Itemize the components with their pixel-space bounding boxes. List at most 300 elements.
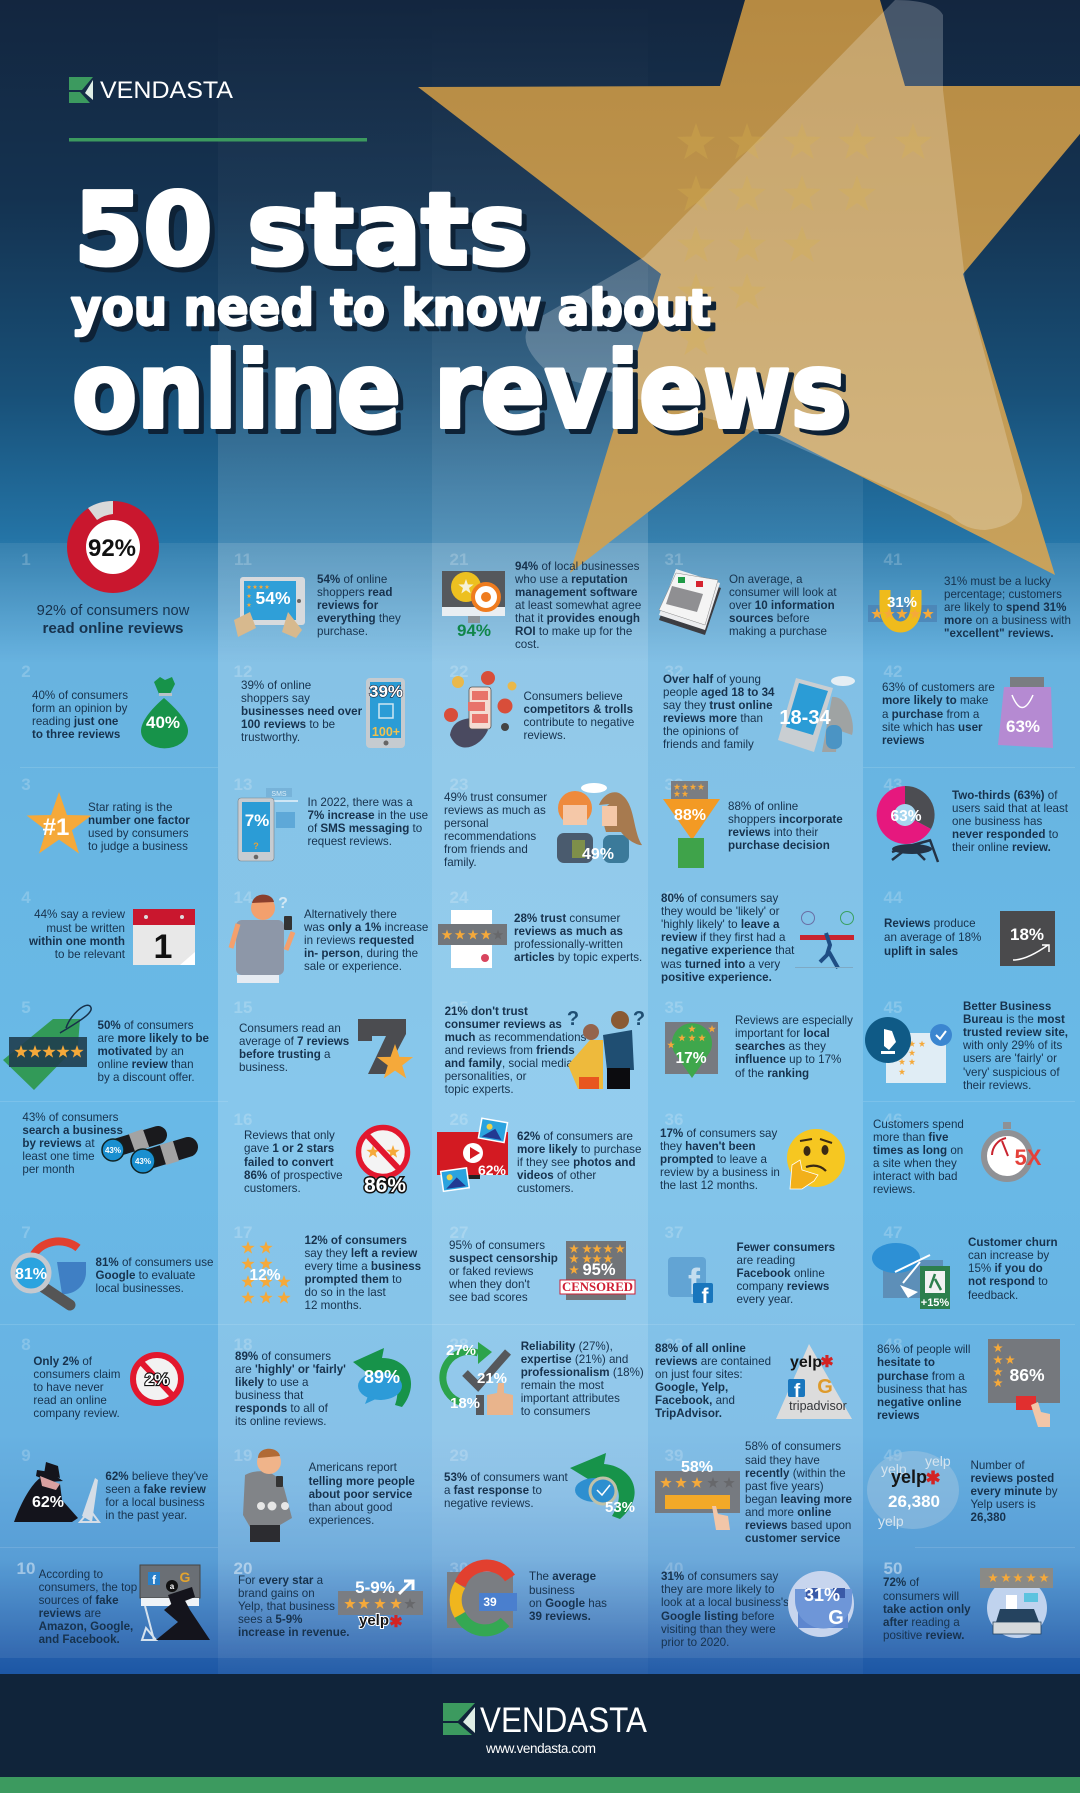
stat 39: reviews based upon: [745, 1519, 851, 1532]
stat 37: every year.: [736, 1293, 793, 1306]
stat 3: to judge a business: [88, 840, 188, 853]
stat 14: sale or experience.: [304, 960, 402, 973]
stat 5: by a discount offer.: [98, 1071, 195, 1084]
stat 23: family.: [444, 856, 477, 869]
stat 45: 45: [884, 998, 902, 1017]
stat 5: motivated by an: [98, 1045, 184, 1058]
stat 28: to consumers: [521, 1405, 590, 1418]
icon: confused man with phone: ?: [278, 895, 288, 912]
stat 32: people aged 18 to 34: [663, 686, 775, 699]
icon: phone with SMS: ?: [253, 841, 259, 851]
icon: funnel with bag: [663, 781, 720, 868]
stat 45: [865, 998, 1068, 1092]
stat 39: began leaving more: [745, 1493, 853, 1506]
stat 13: request reviews.: [308, 835, 392, 848]
stat 3: used by consumers: [88, 827, 189, 840]
icon: stopwatch 5X: [984, 1122, 1042, 1179]
stat 50: [883, 1559, 1053, 1642]
icon: Yelp word cloud: yelp: [881, 1461, 907, 1477]
stat 35: searches as they: [735, 1040, 826, 1053]
stat 18: 18: [234, 1335, 252, 1354]
stat 23: 23: [450, 775, 468, 794]
title: 50 stats: [74, 171, 528, 288]
icon: hand holding phone with emojis: [444, 671, 516, 748]
stat 45: Bureau is the most: [963, 1013, 1065, 1026]
stat 19: [234, 1446, 415, 1542]
stat 45: users are 'fairly' or: [963, 1052, 1057, 1065]
stat 47: can increase by: [968, 1249, 1049, 1262]
stat 19: than about good: [309, 1501, 392, 1514]
stat 19: 19: [234, 1446, 252, 1465]
icon: stopwatch 5X: 5X: [1015, 1145, 1042, 1170]
stat 3: Star rating is the: [88, 801, 172, 814]
icon: Google magnifier: [13, 1241, 86, 1305]
stat 5: online review than: [98, 1058, 194, 1071]
stat 28: professionalism (18%): [521, 1366, 644, 1379]
stat 14: [231, 888, 428, 983]
stat 35: influence up to 17%: [735, 1053, 841, 1066]
stat 20: increase in revenue.: [238, 1626, 350, 1639]
stat 7: 7: [21, 1223, 31, 1242]
stat 28: expertise (21%) and: [521, 1353, 628, 1366]
stat 49: 49: [884, 1446, 902, 1465]
icon: monitor with logos and hacker: [140, 1565, 210, 1640]
stat 35: Reviews are especially: [735, 1014, 853, 1027]
icon: hacker with monitor: [14, 1462, 99, 1522]
stat 26: customers.: [517, 1182, 574, 1195]
stat 44: an average of 18%: [884, 931, 981, 944]
icon: video monitor with photos: 62%: [478, 1162, 507, 1178]
stat 11: 11: [234, 550, 252, 569]
stat 45: Better Business: [963, 1000, 1051, 1013]
icon: fading Facebook logos: f: [688, 1261, 701, 1302]
icon: phone with SMS: SMS: [271, 791, 287, 798]
icon: document with rating: [438, 910, 507, 968]
icon: Yelp stars: 5-9%: [355, 1578, 395, 1597]
stat 6: least one time: [22, 1150, 95, 1163]
stat 13: of SMS messaging to: [308, 822, 422, 835]
stat 10: According to: [39, 1568, 103, 1581]
stat 32: [663, 662, 855, 752]
icon: hacker with monitor: 62%: [32, 1494, 64, 1511]
icon: donut and cricket: 63%: [890, 808, 922, 825]
stat 31: [659, 550, 837, 638]
stat 27: when they don't: [448, 1278, 531, 1291]
stat 17: 12% of consumers: [304, 1234, 407, 1247]
stat 29: a fast response to: [444, 1484, 542, 1497]
stat 37: Fewer consumers: [736, 1241, 835, 1254]
icon: Yelp word cloud: yelp: [878, 1513, 904, 1529]
stat 21: at least somewhat agree: [515, 599, 641, 612]
title: online reviews: [72, 330, 847, 452]
icon: mountain of review logos: f: [794, 1381, 801, 1402]
icon: map pin with stars: [665, 1022, 718, 1078]
icon: two women talking: 49%: [582, 846, 614, 863]
stat 31: over 10 information: [729, 599, 835, 612]
stat 49: Number of: [970, 1459, 1025, 1472]
stat 6: by reviews at: [22, 1137, 95, 1150]
stat 30: on Google has: [529, 1597, 607, 1610]
stat 4: to be relevant: [55, 948, 126, 961]
stat 20: brand gains on: [238, 1587, 315, 1600]
icon: no-stars sign: 86%: [364, 1174, 406, 1197]
stat 29: 53% of consumers want: [444, 1471, 569, 1484]
stat 8: Only 2% of: [33, 1355, 93, 1368]
stat 46: Customers spend: [873, 1118, 964, 1131]
stat 36: review by a business in: [660, 1166, 780, 1179]
stat 32: reviews more than: [663, 712, 763, 725]
stat 47: Customer churn: [968, 1236, 1058, 1249]
stat 1: [21, 501, 190, 637]
stat 41: "excellent" reviews.: [944, 627, 1054, 640]
icon: exit sign and cricket: +15%: [921, 1297, 949, 1309]
icon: mountain of review logos: [776, 1344, 852, 1419]
stat 39: 58% of consumers: [745, 1440, 841, 1453]
stat 16: 86% of prospective: [244, 1169, 343, 1182]
icon: arrow and stopwatch: 53%: [605, 1499, 635, 1516]
stat 16: Reviews that only: [244, 1129, 335, 1142]
stat 23: personal: [444, 817, 488, 830]
stat 26: 62% of consumers are: [517, 1130, 633, 1143]
stat 26: [437, 1110, 641, 1195]
stat 9: 9: [21, 1446, 31, 1465]
icon: binoculars: [102, 1135, 188, 1173]
stat 17: prompted them to: [304, 1273, 402, 1286]
icon: green arrow and speech bubble: [353, 1348, 411, 1407]
stat 5: [3, 998, 210, 1090]
stat 25: 25: [450, 998, 468, 1017]
icon: tilted tablet: [778, 676, 855, 752]
footer band: [0, 1674, 1080, 1793]
icon: donut and cricket: [877, 786, 938, 862]
stat 48: reviews: [877, 1409, 920, 1422]
icon: thinking face emoji: [787, 1129, 845, 1189]
stat 17: 17: [234, 1223, 252, 1242]
stat 25: 21% don't trust: [445, 1005, 528, 1018]
stat 35: [665, 998, 853, 1080]
stat 40: 40: [665, 1559, 683, 1578]
stat 17: say they left a review: [304, 1247, 418, 1260]
icon: green arrow and speech bubble: 89%: [364, 1367, 400, 1387]
icon: mountain of review logos: tripadvisor: [789, 1399, 847, 1413]
stat 15: average of 7 reviews: [239, 1035, 349, 1048]
stat 8: consumers claim: [33, 1368, 120, 1381]
stat 23: recommendations: [444, 830, 536, 843]
stat 8: 8: [21, 1335, 31, 1354]
stat 50: 50: [884, 1559, 902, 1578]
title: [71, 171, 847, 452]
stat 2: 2: [21, 662, 31, 681]
stat 19: experiences.: [309, 1514, 374, 1527]
stat 38: Google, Yelp,: [655, 1381, 728, 1394]
stat 33: 88% of online: [728, 800, 798, 813]
icon: exit sign and cricket: [872, 1243, 950, 1309]
logo: Vendasta footer: VENDASTA: [480, 1701, 648, 1740]
icon: funnel with bag: 88%: [674, 807, 706, 824]
icon: mountain of review logos: ✱: [820, 1354, 834, 1371]
icon: Google G with 39: 39: [483, 1595, 497, 1609]
stat 2: 40% of consumers: [32, 689, 128, 702]
stat 48: purchase from a: [877, 1370, 965, 1383]
stat 27: see bad scores: [449, 1291, 528, 1304]
stat 11: purchase.: [317, 625, 368, 638]
stat 43: Two-thirds (63%) of: [952, 789, 1058, 802]
stat 42: [882, 662, 1053, 748]
icon: seven with star: [358, 1019, 413, 1078]
stat 7: [13, 1223, 213, 1305]
icon: percentages with arrow, check and thumb: 27%: [446, 1342, 476, 1359]
stat 39: past five years): [745, 1480, 824, 1493]
icon: Yelp word cloud: yelp: [891, 1467, 927, 1487]
stat 16: gave 1 or 2 stars: [244, 1142, 334, 1155]
icon: fading Facebook logos: f: [702, 1285, 710, 1308]
stat 8: [21, 1335, 181, 1420]
icon: censored score: [560, 1241, 635, 1300]
icon: Yelp word cloud: yelp: [925, 1453, 951, 1469]
stat 50: 72% of: [883, 1576, 920, 1589]
stat 18: responds to all of: [235, 1402, 329, 1415]
stat 10: reviews are: [39, 1607, 101, 1620]
stat 3: number one factor: [88, 814, 190, 827]
stat 20: Yelp, that business: [238, 1600, 335, 1613]
stat 49: every minute by: [970, 1485, 1058, 1498]
stat 32: say they trust online: [663, 699, 773, 712]
icon: low rating with hand: [988, 1339, 1060, 1427]
stat 40: they are more likely to: [661, 1583, 774, 1596]
stat 29: 29: [450, 1446, 468, 1465]
stat 15: Consumers read an: [239, 1022, 341, 1035]
stat 31: sources before: [729, 612, 810, 625]
stat 16: failed to convert: [244, 1156, 334, 1169]
stat 50: take action only: [883, 1603, 971, 1616]
stat 35: important for local: [735, 1027, 830, 1040]
stat 22: contribute to negative: [524, 716, 634, 729]
stat 37: 37: [665, 1223, 683, 1242]
stat 13: 13: [234, 775, 252, 794]
stat 44: uplift in sales: [884, 945, 958, 958]
stat 9: 62% believe they've: [105, 1470, 208, 1483]
icon: monitor with logos and hacker: f: [152, 1573, 157, 1587]
stat 18: are 'highly' or 'fairly': [235, 1363, 346, 1376]
stat 36: they haven't been: [660, 1140, 756, 1153]
icon: uplift chart: [1000, 911, 1055, 966]
stat 43: one business has: [952, 815, 1042, 828]
stat 26: if they see photos and: [517, 1156, 636, 1169]
icon: phone: [366, 678, 405, 748]
stat 7: 81% of consumers use: [96, 1256, 213, 1269]
text: 92% of consumers now: [37, 603, 190, 619]
icon: percentages with arrow, check and thumb: [443, 1342, 513, 1415]
stat 30: [447, 1559, 607, 1630]
stat 21: who use a reputation: [514, 573, 628, 586]
stat 17: every time a business: [304, 1260, 421, 1273]
stat 34: negative experience that: [661, 944, 795, 957]
icon: phone with SMS: [238, 788, 298, 861]
stat 12: [234, 662, 405, 748]
stat 38: [655, 1335, 852, 1420]
icon: phone: 100+: [372, 725, 400, 739]
stat 43: their online review.: [952, 841, 1051, 854]
stat 6: 43% of consumers: [22, 1111, 119, 1124]
stat 42: 63% of customers are: [882, 681, 995, 694]
stat 21: [442, 550, 641, 651]
stat 35: 35: [665, 998, 683, 1017]
stat 46: times as long on: [873, 1144, 963, 1157]
stat 46: 46: [884, 1110, 902, 1129]
stat 24: professionally-written: [514, 938, 623, 951]
icon: horseshoe: [868, 590, 937, 627]
stat 36: [660, 1110, 845, 1192]
stat 40: prior to 2020.: [661, 1636, 729, 1649]
stat 44: 44: [884, 888, 903, 907]
stat 42: more likely to make: [882, 694, 988, 707]
stat 40: 31% of consumers say: [661, 1570, 778, 1583]
stat 25: topic experts.: [445, 1083, 514, 1096]
stat 32: 32: [665, 662, 683, 681]
stat 22: Consumers believe: [524, 690, 623, 703]
icon: Yelp word cloud: [867, 1451, 959, 1529]
stat 39: and more online: [745, 1506, 832, 1519]
stat 9: for a local business: [105, 1496, 205, 1509]
stat 48: hesitate to: [877, 1356, 935, 1369]
icon: video monitor with photos: [437, 1118, 508, 1191]
stat 43: 43: [884, 775, 902, 794]
stat 17: [234, 1223, 421, 1312]
stat 49: 26,380: [970, 1511, 1006, 1524]
stat 10: Amazon, Google,: [39, 1620, 133, 1633]
stat 12: 12: [234, 662, 252, 681]
stat 6: [22, 1111, 188, 1176]
icon: star number one: #1: [43, 814, 69, 841]
stat 2: reading just one: [32, 715, 119, 728]
stat 18: [234, 1335, 411, 1428]
stat 5: 50% of consumers: [98, 1019, 194, 1032]
stat 46: [873, 1110, 1042, 1196]
icon: monitor with badges: [442, 571, 505, 640]
stat 11: everything they: [317, 612, 401, 625]
stat 24: 24: [450, 888, 469, 907]
stat 16: 16: [234, 1110, 252, 1129]
stat 46: reviews.: [873, 1183, 916, 1196]
stat 27: 95% of consumers: [449, 1239, 545, 1252]
stat 41: percentage; customers: [944, 588, 1062, 601]
stat 15: [234, 998, 413, 1078]
stat 45: trusted review site,: [963, 1026, 1068, 1039]
stat 33: purchase decision: [728, 839, 830, 852]
stat 13: In 2022, there was a: [308, 796, 413, 809]
icon: two women talking: [557, 783, 642, 863]
stat 36: the last 12 months.: [660, 1179, 758, 1192]
stat 24: reviews as much as: [514, 925, 623, 938]
icon: binoculars: 43%: [105, 1146, 121, 1155]
stat 21: cost.: [515, 638, 539, 651]
icon: phone with SMS: 7%: [245, 811, 269, 830]
stat 48: negative online: [877, 1396, 962, 1409]
stat 42: a purchase from a: [882, 708, 980, 721]
icon: confused man with phone: [231, 895, 293, 983]
stat 30: 39 reviews.: [529, 1610, 591, 1623]
stat 49: [867, 1446, 1058, 1529]
stat 33: reviews into their: [728, 826, 818, 839]
stat 35: of the ranking: [735, 1067, 809, 1080]
stat 45: 'very' suspicious of: [963, 1066, 1060, 1079]
stat 46: interact with bad: [873, 1170, 957, 1183]
stat 12: 100 reviews to be: [241, 718, 335, 731]
stat 8: read an online: [33, 1394, 107, 1407]
stat 28: 28: [450, 1335, 468, 1354]
stat 32: friends and family: [663, 738, 754, 751]
stat 14: in- person, during the: [304, 947, 418, 960]
stat 28: remain the most: [521, 1379, 605, 1392]
stat 21: 21: [450, 550, 468, 569]
stat 42: site which has user: [882, 721, 983, 734]
stat 1: 1: [21, 550, 31, 569]
stat 25: and family, social media: [445, 1057, 573, 1070]
stat 23: [444, 775, 642, 869]
stat 21: ROI to make up for the: [515, 625, 632, 638]
stat 49: reviews posted: [970, 1472, 1054, 1485]
stat 6: per month: [22, 1163, 75, 1176]
stat 16: [234, 1110, 408, 1197]
stat 48: 48: [884, 1335, 902, 1354]
stat 21: management software: [515, 586, 638, 599]
stat 14: 14: [234, 888, 253, 907]
icon: percentages with arrow, check and thumb: 18%: [450, 1395, 480, 1412]
icon: percentages with arrow, check and thumb: 21%: [477, 1370, 507, 1387]
stat 25: much as recommendations: [445, 1031, 587, 1044]
stat 17: 12 months.: [304, 1299, 362, 1312]
icon: Google storefront circle: [788, 1571, 854, 1637]
icon: prohibited sign: [133, 1355, 181, 1403]
stat 31: 31: [665, 550, 683, 569]
icon: monitor with logos and hacker: G: [180, 1569, 191, 1585]
icon: man with phone: [243, 1449, 292, 1542]
stat 40: Google listing before: [661, 1610, 774, 1623]
icon: Yelp word cloud: 26,380: [888, 1492, 940, 1511]
stat 14: in reviews requested: [304, 934, 414, 947]
icon: uplift chart: 18%: [1010, 925, 1044, 944]
stat 5: are more likely to be: [98, 1032, 210, 1045]
stat 6: search a business: [22, 1124, 123, 1137]
stat 22: [444, 662, 634, 748]
icon: monitor with logos and hacker: a: [170, 1582, 175, 1591]
stat 34: 'highly likely' to leave a: [661, 918, 780, 931]
icon: prohibited sign: 2%: [145, 1370, 169, 1389]
stat 20: [234, 1559, 423, 1639]
icon: tablet: [234, 577, 305, 638]
stat 14: was only a 1% increase: [303, 921, 428, 934]
stat 7: Google to evaluate: [96, 1269, 195, 1282]
stat 41: 41: [884, 550, 902, 569]
stat 30: 30: [450, 1559, 468, 1578]
stat 27: 27: [450, 1223, 468, 1242]
stat 19: telling more people: [309, 1475, 415, 1488]
stat 9: seen a fake review: [105, 1483, 207, 1496]
icon: stack of review pages: [659, 569, 721, 635]
stat 28: important attributes: [521, 1392, 620, 1405]
stat 36: prompted to leave a: [660, 1153, 768, 1166]
website url: www.vendasta.com: [485, 1741, 596, 1756]
stat 28: Reliability (27%),: [521, 1340, 613, 1353]
stat 27: or faked reviews: [449, 1265, 534, 1278]
icon: binoculars: 43%: [135, 1157, 151, 1166]
stat 23: reviews as much as: [444, 804, 546, 817]
stat 44: [884, 888, 1055, 966]
stat 43: users said that at least: [952, 802, 1069, 815]
stat 10: 10: [17, 1559, 35, 1578]
icon: map pin with stars: 17%: [675, 1050, 707, 1067]
stat 4: 4: [21, 888, 31, 907]
